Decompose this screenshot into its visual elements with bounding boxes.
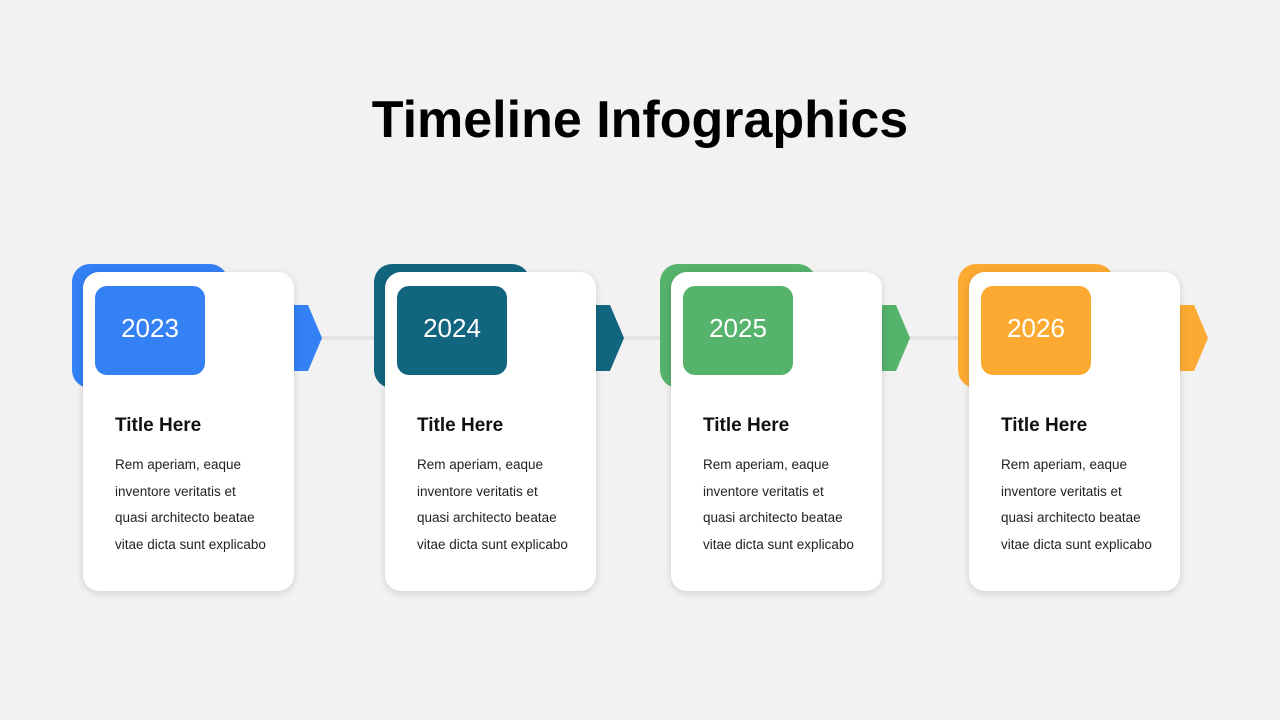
title text: Title Here <box>1001 415 1087 436</box>
year <box>981 286 1091 375</box>
year: 2024 <box>423 313 481 343</box>
body text: Rem aperiam, eaque <box>703 457 829 472</box>
body text <box>417 457 568 552</box>
card <box>83 272 294 591</box>
step 2025 <box>660 264 910 596</box>
body text: vitae dicta sunt explicabo <box>1001 537 1152 552</box>
year <box>397 286 507 375</box>
back block <box>374 264 530 388</box>
body text: inventore veritatis et <box>115 484 236 499</box>
year: 2026 <box>1007 313 1065 343</box>
title text: Title Here <box>417 415 503 436</box>
year: 2023 <box>121 313 179 343</box>
step 2024 <box>374 264 624 596</box>
body text <box>703 457 854 552</box>
arrow <box>294 305 322 371</box>
body text: inventore veritatis et <box>417 484 538 499</box>
title: Timeline Infographics <box>372 91 908 149</box>
body text: inventore veritatis et <box>703 484 824 499</box>
arrow <box>882 305 910 371</box>
body text: inventore veritatis et <box>1001 484 1122 499</box>
arrow <box>596 305 624 371</box>
title text: Title Here <box>703 415 789 436</box>
body text: Rem aperiam, eaque <box>115 457 241 472</box>
step 2023 <box>72 264 322 596</box>
body text: vitae dicta sunt explicabo <box>417 537 568 552</box>
card <box>385 272 596 591</box>
card <box>969 272 1180 591</box>
body text: vitae dicta sunt explicabo <box>115 537 266 552</box>
body text: Rem aperiam, eaque <box>417 457 543 472</box>
back block <box>72 264 228 388</box>
year: 2025 <box>709 313 767 343</box>
body text <box>115 457 266 552</box>
body text: quasi architecto beatae <box>1001 510 1141 525</box>
back block <box>660 264 816 388</box>
body text: quasi architecto beatae <box>417 510 557 525</box>
title text: Title Here <box>115 415 201 436</box>
body text: quasi architecto beatae <box>703 510 843 525</box>
step 2026 <box>958 264 1208 596</box>
year <box>95 286 205 375</box>
year <box>683 286 793 375</box>
arrow <box>1180 305 1208 371</box>
body text: vitae dicta sunt explicabo <box>703 537 854 552</box>
body text <box>1001 457 1152 552</box>
card <box>671 272 882 591</box>
body text: Rem aperiam, eaque <box>1001 457 1127 472</box>
body text: quasi architecto beatae <box>115 510 255 525</box>
back block <box>958 264 1114 388</box>
